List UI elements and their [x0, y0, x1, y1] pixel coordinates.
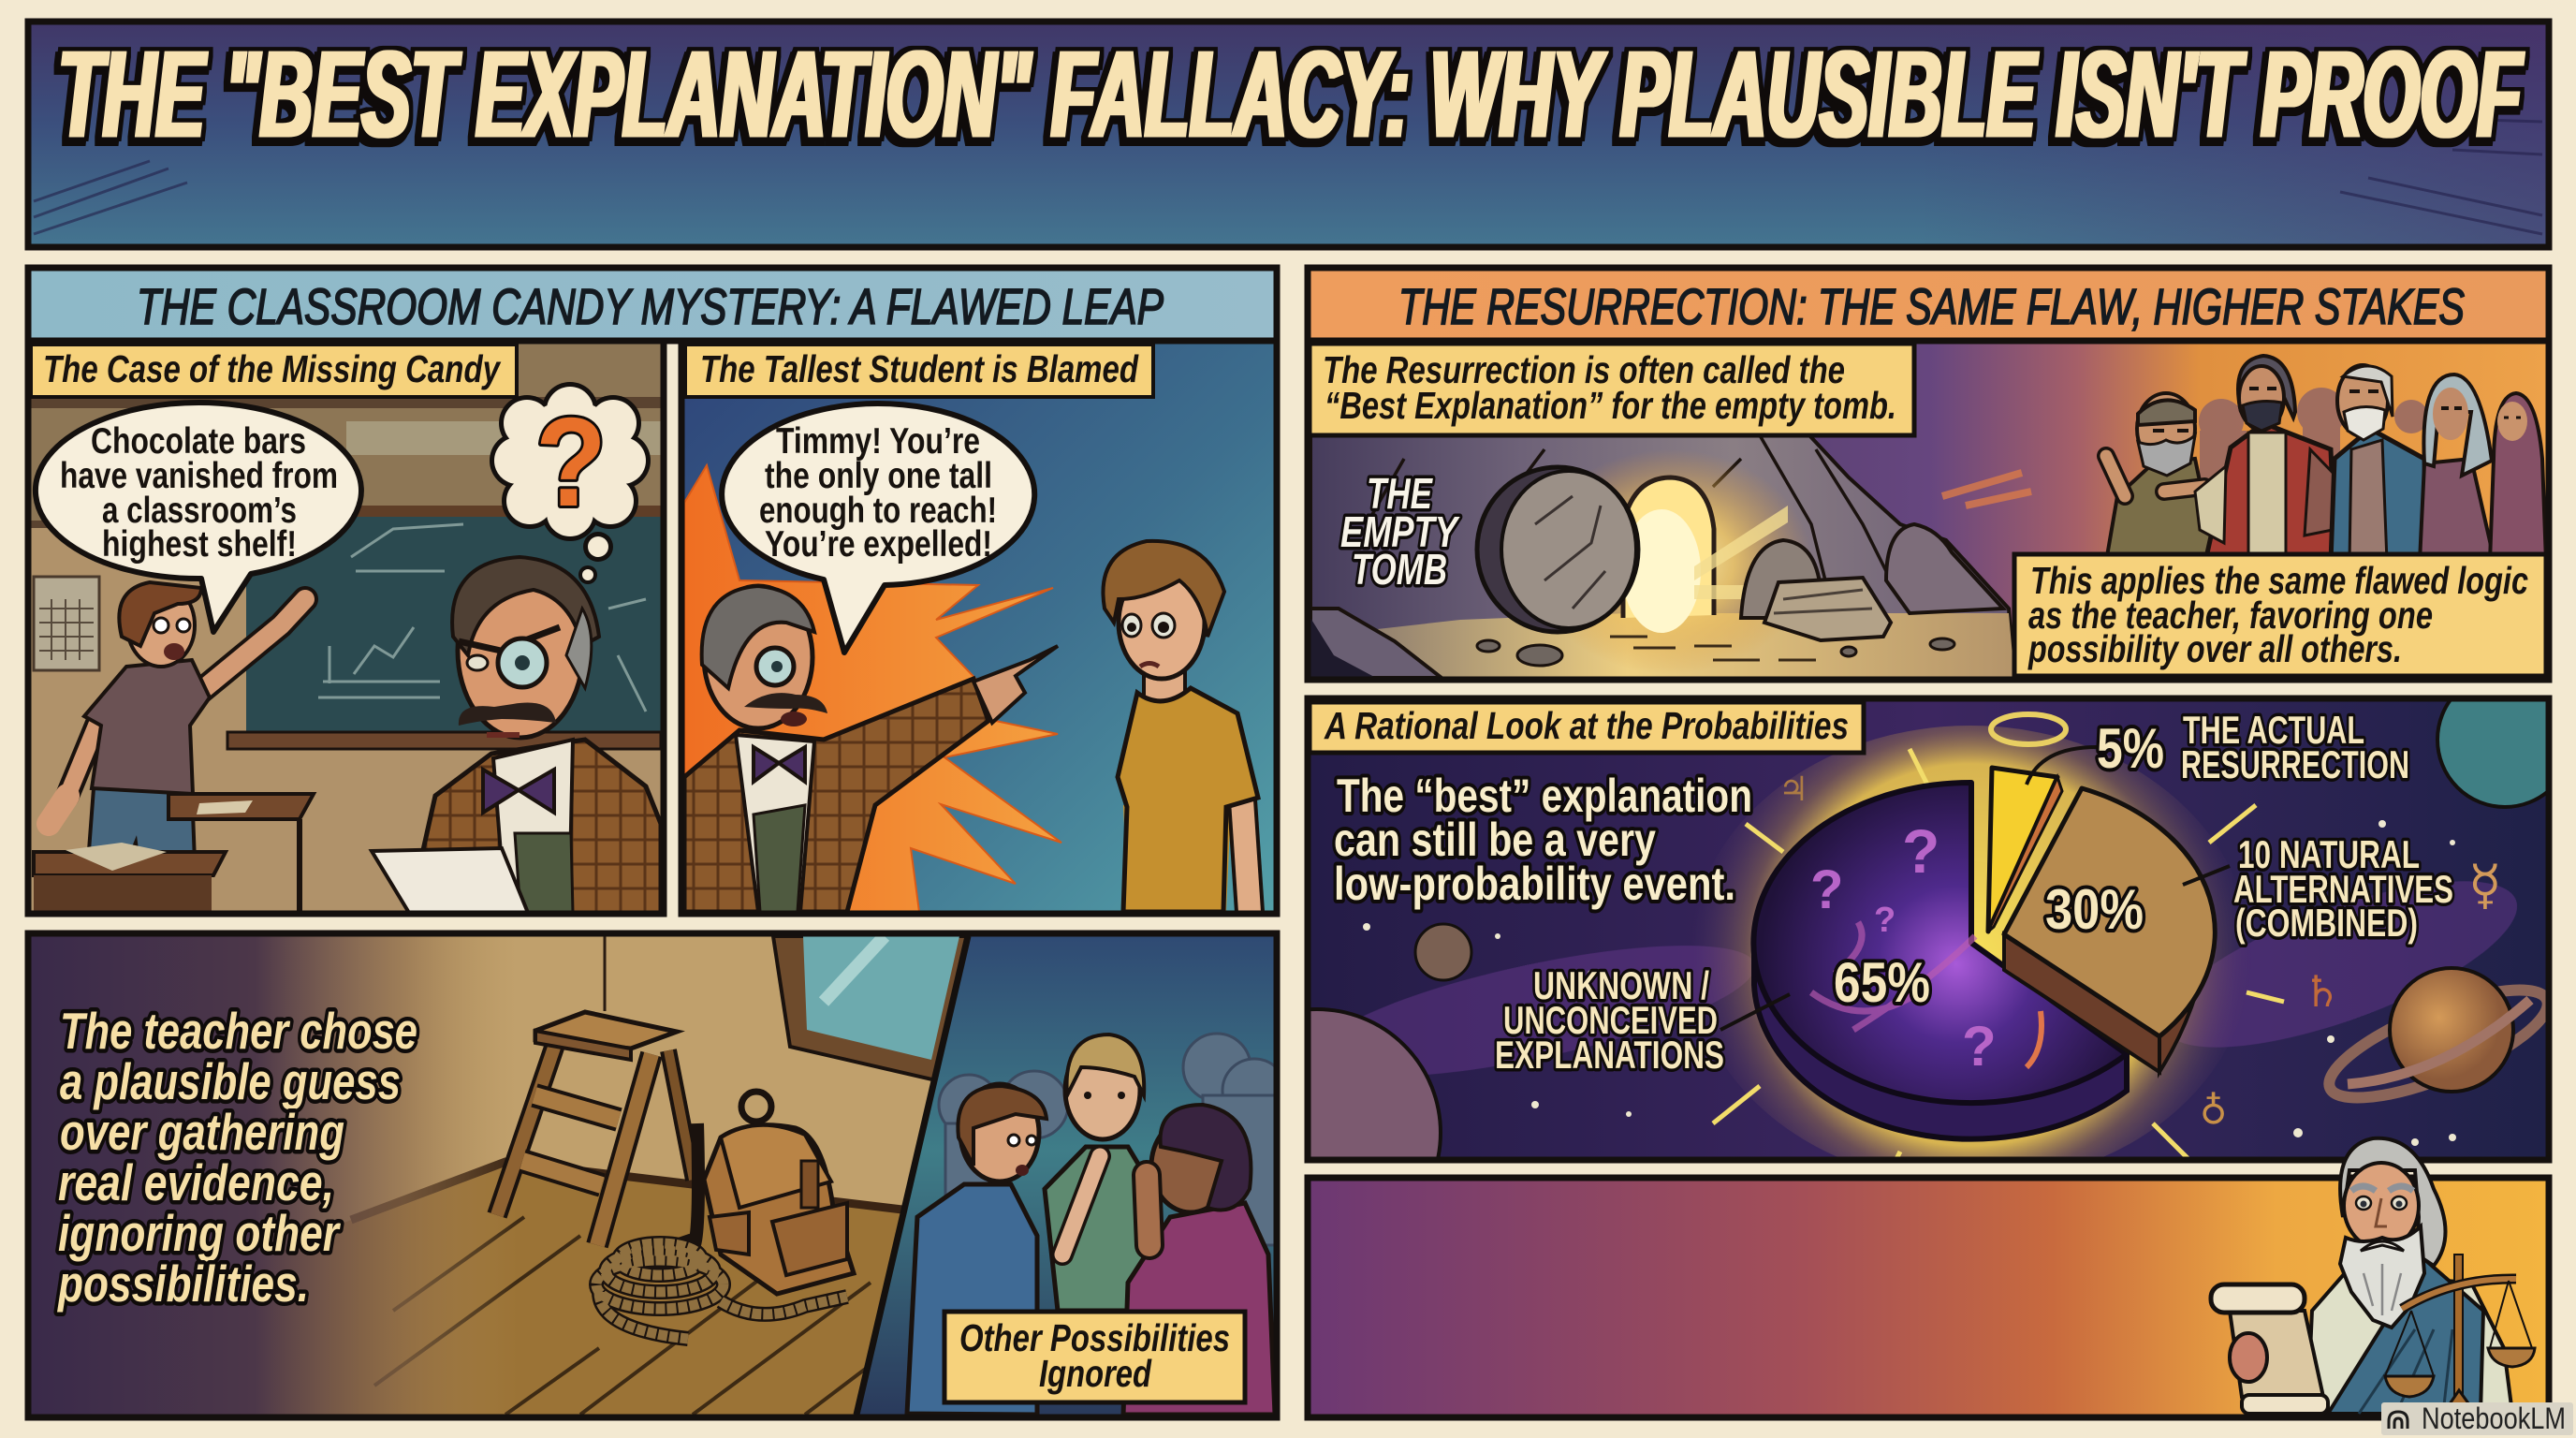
- pie label: 5% actual resurrection: RESURRECTION: [2181, 742, 2409, 786]
- pie label: 5% actual resurrection: 5%: [2097, 717, 2164, 780]
- title banner: [28, 22, 2549, 247]
- speech bubble: have vanished from: [60, 456, 338, 496]
- caption: The Resurrection is often called the: [1323, 348, 1845, 391]
- thought bubble with question mark: [490, 382, 651, 584]
- leader lines: [1720, 747, 2230, 1030]
- stars and symbols: ♃: [1778, 770, 1808, 809]
- stars and symbols: [1363, 770, 2502, 1146]
- pie label: 5% actual resurrection: [2097, 708, 2409, 786]
- pie chart: ?: [1810, 859, 1843, 920]
- caption: other possibilities ignored: Other Possibilities: [959, 1316, 1230, 1359]
- tall student: [1103, 541, 1258, 912]
- caption: “Best Explanation” for the empty tomb.: [1325, 384, 1896, 427]
- speech bubble: [722, 404, 1034, 653]
- panel: other possibilities ignored: [28, 933, 1286, 1417]
- panel: bottom gradient banner: [1308, 1178, 2549, 1417]
- wooden floor: [320, 1157, 902, 1414]
- header text: THE CLASSROOM CANDY MYSTERY: A FLAWED LEAP: [137, 279, 1164, 335]
- pie label: 30% natural alternatives: (COMBINED): [2235, 901, 2418, 945]
- caption: The Tallest Student is Blamed: [700, 347, 1139, 390]
- panel: probabilities: [1193, 672, 2572, 1256]
- speech bubble: Chocolate bars: [91, 421, 306, 462]
- whispering students: [842, 936, 1286, 1415]
- narration text: ignoring other: [58, 1204, 341, 1262]
- pie chart: [1753, 714, 2215, 1139]
- planets: [1193, 672, 2572, 1256]
- label: the empty tomb: [1340, 469, 1460, 594]
- narration text: over gathering: [60, 1103, 344, 1161]
- caption: [685, 345, 1153, 397]
- pie label: 30% natural alternatives: 10 NATURAL: [2238, 832, 2420, 876]
- speech bubble: [36, 403, 361, 632]
- pie label: 65% unknown: UNKNOWN /: [1533, 963, 1709, 1007]
- narration text: [56, 1002, 417, 1313]
- stars and symbols: ☿: [2468, 853, 2502, 917]
- pie label: 65% unknown: UNCONCEIVED: [1503, 998, 1718, 1042]
- statement text: can still be a very: [1334, 814, 1656, 866]
- label: the empty tomb: THE: [1367, 469, 1433, 518]
- desks: [34, 794, 314, 913]
- caption: [2014, 554, 2546, 676]
- label: the empty tomb: TOMB: [1352, 545, 1447, 594]
- panel: empty tomb: [1308, 341, 2549, 680]
- speech bubble: You’re expelled!: [765, 524, 992, 565]
- stars and symbols: ♄: [2303, 966, 2341, 1017]
- student pointing: [37, 580, 318, 850]
- coil of rope: [596, 1243, 847, 1339]
- pie label: 65% unknown: 65%: [1834, 951, 1930, 1014]
- narration text: a plausible guess: [60, 1052, 401, 1110]
- narration text: possibilities.: [56, 1255, 309, 1313]
- caption: [31, 345, 517, 397]
- pie label: 30% natural alternatives: [2045, 832, 2453, 945]
- caption: other possibilities ignored: [944, 1312, 1245, 1402]
- group of witnesses: [2106, 356, 2546, 564]
- pie chart: ?: [1902, 816, 1939, 886]
- pie label: 65% unknown: EXPLANATIONS: [1495, 1033, 1724, 1077]
- caption: as the teacher, favoring one: [2028, 594, 2433, 637]
- teacher: [372, 557, 661, 913]
- pie label: 65% unknown: [1495, 951, 1930, 1077]
- caption: A Rational Look at the Probabilities: [1324, 704, 1849, 747]
- panel: the tallest student is blamed: [681, 341, 1277, 914]
- pie label: 30% natural alternatives: 30%: [2045, 878, 2144, 941]
- speech bubble: highest shelf!: [102, 524, 297, 565]
- cave and empty tomb: [1310, 435, 2014, 678]
- panel: classroom candy mystery header: [28, 268, 1277, 341]
- backpack: [683, 1092, 854, 1294]
- pie label: 30% natural alternatives: ALTERNATIVES: [2233, 867, 2453, 911]
- pie chart: ?: [1962, 1015, 1997, 1078]
- shouting teacher: [684, 586, 1058, 912]
- caption: other possibilities ignored: Ignored: [1039, 1352, 1152, 1395]
- orange starburst: [684, 465, 1061, 912]
- speech bubble: the only one tall: [765, 456, 992, 496]
- panel: resurrection header: [1308, 268, 2549, 341]
- step stool: [497, 1012, 694, 1245]
- caption: The Case of the Missing Candy: [43, 347, 502, 390]
- speech bubble: a classroom’s: [102, 491, 297, 531]
- statement text: low-probability event.: [1334, 858, 1735, 910]
- stars and symbols: ♁: [2200, 1090, 2227, 1133]
- pie chart: ?: [1874, 901, 1895, 940]
- caption: [1310, 344, 1914, 435]
- speech bubble: enough to reach!: [759, 491, 997, 531]
- narration text: real evidence,: [58, 1153, 334, 1211]
- caption: possibility over all others.: [2027, 627, 2402, 670]
- label: the empty tomb: EMPTY: [1340, 507, 1460, 556]
- icon: philosopher with scroll and scales: [2211, 1138, 2535, 1414]
- pie label: 5% actual resurrection: THE ACTUAL: [2183, 708, 2364, 752]
- statement text: The “best” explanation: [1337, 770, 1752, 822]
- panel: the case of the missing candy: [28, 341, 664, 914]
- window: [773, 936, 968, 1080]
- thought bubble with question mark: ?: [535, 391, 607, 533]
- speech bubble: Timmy! You’re: [776, 421, 980, 462]
- statement text: [1334, 770, 1752, 910]
- narration text: The teacher chose: [60, 1002, 417, 1060]
- glow and rays: [1690, 726, 2284, 1184]
